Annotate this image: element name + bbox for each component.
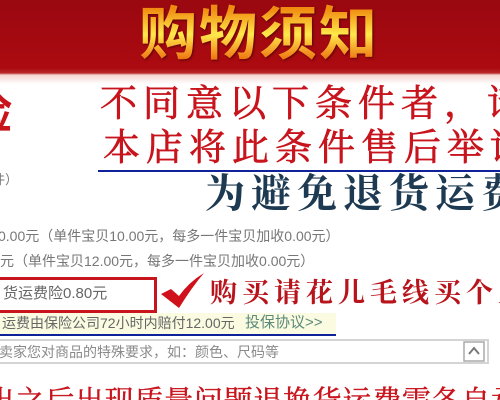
icon: check mark (161, 273, 204, 308)
scroll button (463, 341, 485, 362)
shipping option 2: 元（单件宝贝12.00元，每多一件宝贝加收0.00元） (0, 253, 314, 269)
red highlight box (0, 277, 157, 313)
banner (0, 0, 500, 84)
insurance price: 货运费险0.80元 (3, 285, 107, 302)
shipping option 1: 0.00元（单件宝贝10.00元，每多一件宝贝加收0.00元） (0, 228, 340, 244)
blue rule (0, 334, 336, 336)
yellow insurance strip (0, 313, 336, 334)
title: 购物须知 (139, 2, 379, 67)
message input (0, 339, 489, 364)
insurance payout: 运费由保险公司72小时内赔付12.00元 (2, 315, 235, 331)
blue underline (98, 170, 500, 172)
insurance agreement link: 投保协议>> (245, 314, 323, 331)
input placeholder: 卖家您对商品的特殊要求，如：颜色、尺码等 (0, 344, 279, 360)
